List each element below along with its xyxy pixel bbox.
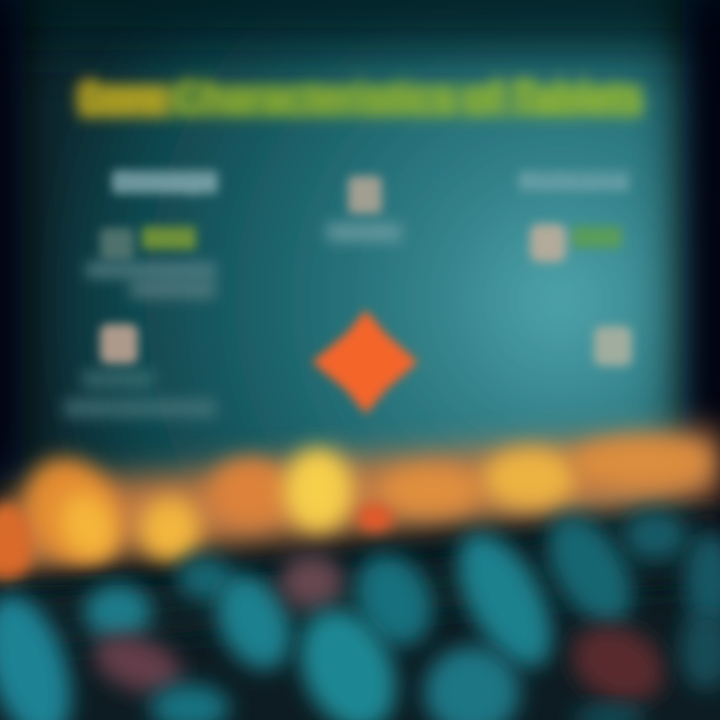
- icon: top centre: [348, 176, 382, 214]
- tablet: [202, 562, 306, 682]
- tablet: [281, 593, 415, 720]
- tablet: [84, 584, 152, 640]
- left item: icon and label: Forms: [142, 229, 196, 249]
- icon: lower left: [100, 324, 138, 364]
- tablet: [680, 610, 720, 690]
- right item: icon and label: Action: [572, 230, 622, 247]
- text block: lower left: Uniform dose and weight: [64, 400, 216, 416]
- left item: description: Solid oral dosage forms: [87, 262, 217, 278]
- tablet: [438, 518, 572, 682]
- tablet: [86, 624, 190, 704]
- column heading: right: [518, 170, 630, 194]
- icon: centre orange diamond: [312, 310, 418, 414]
- tablet: [574, 706, 646, 720]
- tablet: [531, 501, 649, 639]
- left item: description: [86, 262, 217, 298]
- tablet: [341, 541, 447, 659]
- column heading: left: Dosage: [112, 169, 218, 196]
- tablet: [177, 556, 233, 600]
- text block: top centre: [326, 222, 402, 242]
- column heading: right: Release: [520, 172, 628, 194]
- text block: lower left: [64, 370, 216, 418]
- right item: icon and label: [530, 224, 622, 262]
- left item: icon and label: [100, 226, 196, 260]
- tablet: [280, 554, 344, 610]
- tablet: [0, 584, 88, 720]
- tablet: [684, 532, 720, 628]
- text block: top centre: Stability: [328, 225, 401, 242]
- tablet: [424, 646, 520, 720]
- icon: lower right: [594, 326, 632, 366]
- tablet: [559, 611, 677, 717]
- tablet: [623, 511, 687, 559]
- dark teal tablets foreground: [0, 501, 720, 720]
- tablet: [150, 684, 230, 720]
- band of glowing orange tablets: [0, 428, 720, 587]
